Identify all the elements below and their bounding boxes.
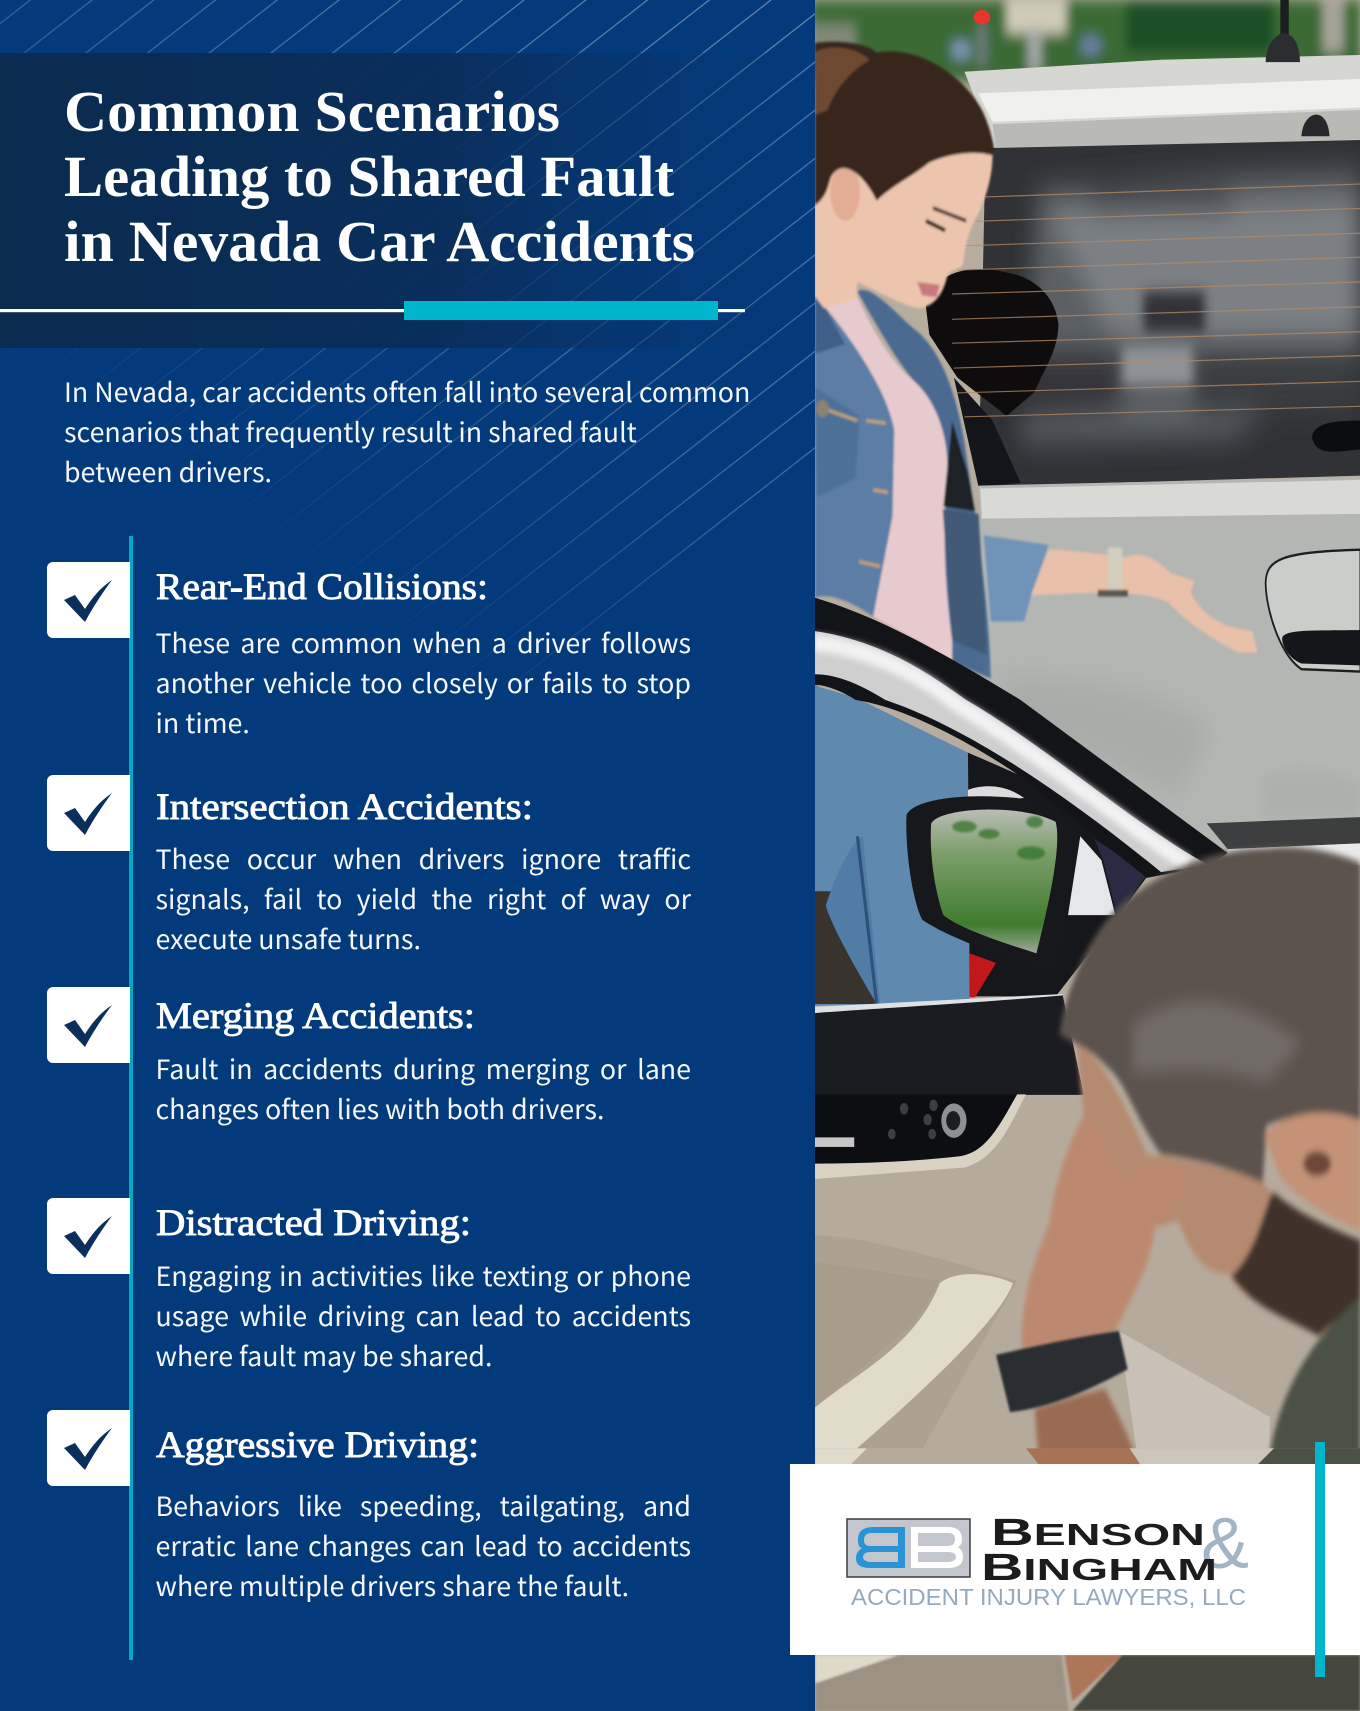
- body text: [156, 838, 692, 956]
- logo tagline: ACCIDENT INJURY LAWYERS, LLC: [851, 1584, 1246, 1610]
- intro text: [64, 371, 750, 490]
- item: merging accidents: [47, 987, 691, 1126]
- door top sill and black trim: [815, 994, 1063, 1015]
- door frame: silver band: [815, 631, 1208, 872]
- body text: [156, 622, 691, 740]
- title: [64, 79, 695, 274]
- icon: checkbox: [47, 1410, 130, 1486]
- body text: Behaviors like speeding, tailgating, and: [156, 1484, 691, 1524]
- body text: [156, 1048, 691, 1126]
- waist and jeans: [815, 684, 929, 750]
- face and neck: [815, 153, 993, 308]
- door beige panel: [815, 1092, 1360, 1455]
- rear window: [978, 140, 1360, 487]
- man: [1022, 847, 1360, 1455]
- lower photo: man in driver seat: [815, 598, 1360, 1455]
- body text: another vehicle too closely or fails to stop: [156, 662, 691, 700]
- body text: where fault may be shared.: [156, 1334, 492, 1374]
- body text: Engaging in activities like texting or phone: [156, 1254, 691, 1294]
- intro text: between drivers.: [64, 451, 272, 490]
- arm and hand: [1022, 1116, 1186, 1364]
- shirt: [824, 296, 952, 662]
- body text: erratic lane changes can lead to accidents: [156, 1524, 691, 1564]
- face: [1077, 1044, 1360, 1336]
- watch: [1108, 547, 1122, 593]
- area behind mirror: [968, 753, 1147, 996]
- body text: signals, fail to yield the right of way or: [156, 878, 691, 916]
- jeans: [815, 686, 970, 1006]
- body text: in time.: [156, 702, 250, 740]
- heading: Intersection Accidents:: [156, 787, 533, 828]
- heading: Rear-End Collisions:: [156, 567, 488, 608]
- intro text: In Nevada, car accidents often fall into several common: [64, 371, 750, 410]
- body text: changes often lies with both drivers.: [156, 1088, 604, 1126]
- body text: execute unsafe turns.: [156, 918, 421, 956]
- body text: These are common when a driver follows: [156, 622, 691, 660]
- item: distracted driving: [47, 1198, 691, 1374]
- body text: These occur when drivers ignore traffic: [156, 838, 691, 876]
- icon: checkbox: [47, 562, 130, 638]
- body text: [156, 1484, 691, 1604]
- body text: [156, 1254, 691, 1374]
- wing mirror: [906, 796, 1079, 975]
- title: in Nevada Car Accidents: [64, 209, 695, 274]
- icon: checkbox: [47, 775, 130, 851]
- reflected silhouette: [926, 269, 1059, 416]
- body text: usage while driving can lead to accidents: [156, 1294, 691, 1334]
- background car body: [1007, 700, 1360, 863]
- body text: Fault in accidents during merging or lane: [156, 1048, 691, 1086]
- wrist watch: [996, 1331, 1128, 1412]
- title: Common Scenarios: [64, 79, 560, 144]
- lower photo strip around logo: [815, 1448, 1360, 1711]
- door controls: [941, 1103, 967, 1138]
- door frame: black outer band: [815, 598, 1228, 878]
- logo panel: B INGHAM: [981, 1547, 1217, 1589]
- upper photo: woman beside silver car: [810, 0, 1360, 750]
- icon: checkbox: [47, 987, 130, 1063]
- car roof: [964, 55, 1360, 151]
- beard: [1231, 1192, 1360, 1336]
- window heater lines: [952, 184, 1360, 417]
- logo panel: [790, 1464, 1360, 1655]
- item: intersection accidents: [47, 775, 692, 956]
- heading: Merging Accidents:: [156, 996, 475, 1037]
- logo name: B ENSON: [991, 1512, 1205, 1554]
- heading: Distracted Driving:: [156, 1203, 471, 1244]
- hair: [1059, 847, 1360, 1183]
- heading: Aggressive Driving:: [156, 1425, 479, 1466]
- teal accent bar on logo: [1314, 1442, 1324, 1677]
- title rule with teal accent: [0, 301, 745, 320]
- sleeve: [984, 535, 1049, 621]
- item: aggressive driving: [47, 1410, 691, 1604]
- shirt: [1270, 1298, 1360, 1455]
- left blue panel with diagonal line pattern: [0, 0, 815, 1711]
- title: Leading to Shared Fault: [64, 144, 675, 209]
- jacket: [815, 296, 894, 617]
- body text: where multiple drivers share the fault.: [156, 1564, 629, 1604]
- street background: [810, 0, 1360, 81]
- vertical teal timeline: [129, 536, 133, 1660]
- arm and hand: [1031, 550, 1258, 652]
- hair: [815, 42, 994, 206]
- car door panel: [978, 477, 1360, 750]
- logo ampersand: &: [1201, 1504, 1249, 1584]
- intro text: scenarios that frequently result in shared fault: [64, 411, 637, 450]
- ear: [1265, 1113, 1360, 1231]
- icon: checkbox: [47, 1198, 130, 1274]
- eye, brow and lips: [926, 221, 945, 230]
- logo mark: BB monogram: [847, 1519, 970, 1577]
- item: rear-end collisions: [47, 562, 691, 740]
